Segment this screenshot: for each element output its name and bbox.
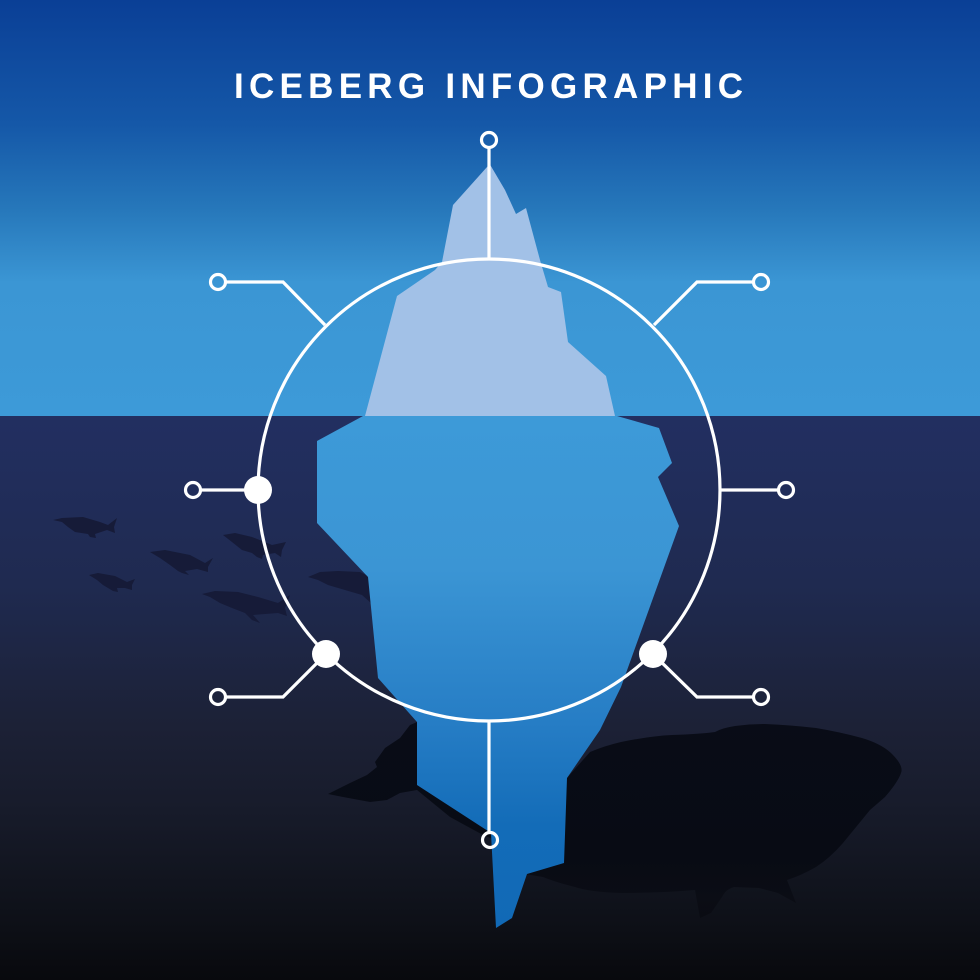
connector: upper left bbox=[210, 274, 325, 325]
penguin group silhouettes bbox=[53, 517, 372, 623]
penguin 1 bbox=[53, 517, 117, 538]
penguin 6 bbox=[308, 571, 372, 604]
whale tail bbox=[328, 720, 495, 840]
whale silhouette bbox=[328, 720, 902, 918]
penguin 5 bbox=[202, 591, 290, 623]
connector: right bbox=[720, 482, 794, 498]
penguin 3 bbox=[223, 533, 286, 559]
penguin 4 bbox=[89, 573, 135, 592]
connector: lower left bbox=[210, 640, 340, 704]
title: ICEBERG INFOGRAPHIC bbox=[234, 67, 743, 106]
connector: top bbox=[482, 132, 496, 259]
whale body bbox=[525, 724, 902, 918]
circular connector diagram bbox=[186, 132, 794, 848]
connector: left bbox=[186, 476, 272, 504]
connector: lower right bbox=[639, 640, 768, 704]
main ring bbox=[258, 259, 720, 721]
connector: upper right bbox=[654, 274, 768, 325]
iceberg under water bbox=[317, 416, 679, 928]
sea background bbox=[0, 416, 980, 980]
penguin 2 bbox=[150, 550, 213, 575]
connector: bottom bbox=[482, 721, 498, 848]
sky background bbox=[0, 0, 980, 416]
iceberg above water bbox=[365, 164, 615, 416]
